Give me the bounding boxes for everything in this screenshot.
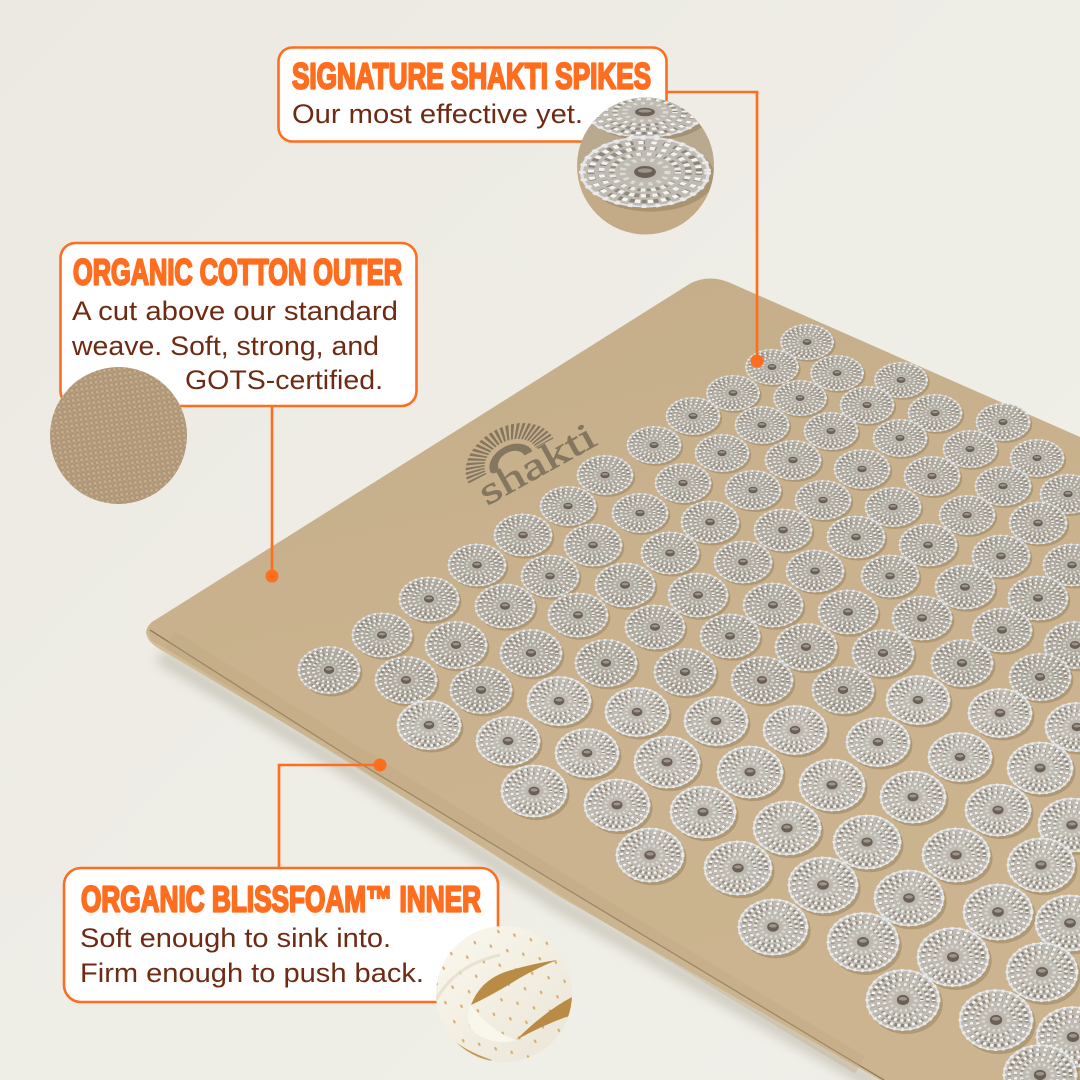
inset photo: spikes close-up bbox=[577, 98, 714, 234]
callout: organic cotton outer: ORGANIC COTTON OUTER bbox=[73, 252, 402, 292]
callout: organic blissfoam inner: Firm enough to push back. bbox=[80, 958, 424, 988]
callout: organic cotton outer: weave. Soft, strong, and bbox=[71, 331, 379, 361]
callout: signature shakti spikes: SIGNATURE SHAKTI SPIKES bbox=[292, 56, 651, 96]
callout: organic cotton outer bbox=[60, 243, 416, 582]
callout: signature shakti spikes: Our most effective yet. bbox=[292, 99, 583, 129]
callout: organic cotton outer: A cut above our standard bbox=[72, 296, 398, 326]
logo: shakti on mat: shakti bbox=[471, 415, 603, 514]
spike discs grid bbox=[299, 325, 1080, 1080]
inset photo: latex foam bbox=[434, 924, 574, 1068]
callout: organic blissfoam inner: ORGANIC BLISSFOAM™ INNER bbox=[81, 878, 481, 920]
callout: organic blissfoam inner bbox=[64, 758, 498, 1002]
inset photo: cotton weave bbox=[50, 367, 187, 504]
mat shadow bbox=[160, 656, 890, 1080]
callout: organic cotton outer: GOTS-certified. bbox=[185, 365, 383, 395]
acupressure mat bbox=[146, 278, 1080, 1080]
callout: signature shakti spikes bbox=[278, 48, 764, 368]
callout: organic blissfoam inner: Soft enough to sink into. bbox=[80, 923, 391, 953]
logo: shakti on mat bbox=[465, 415, 603, 514]
